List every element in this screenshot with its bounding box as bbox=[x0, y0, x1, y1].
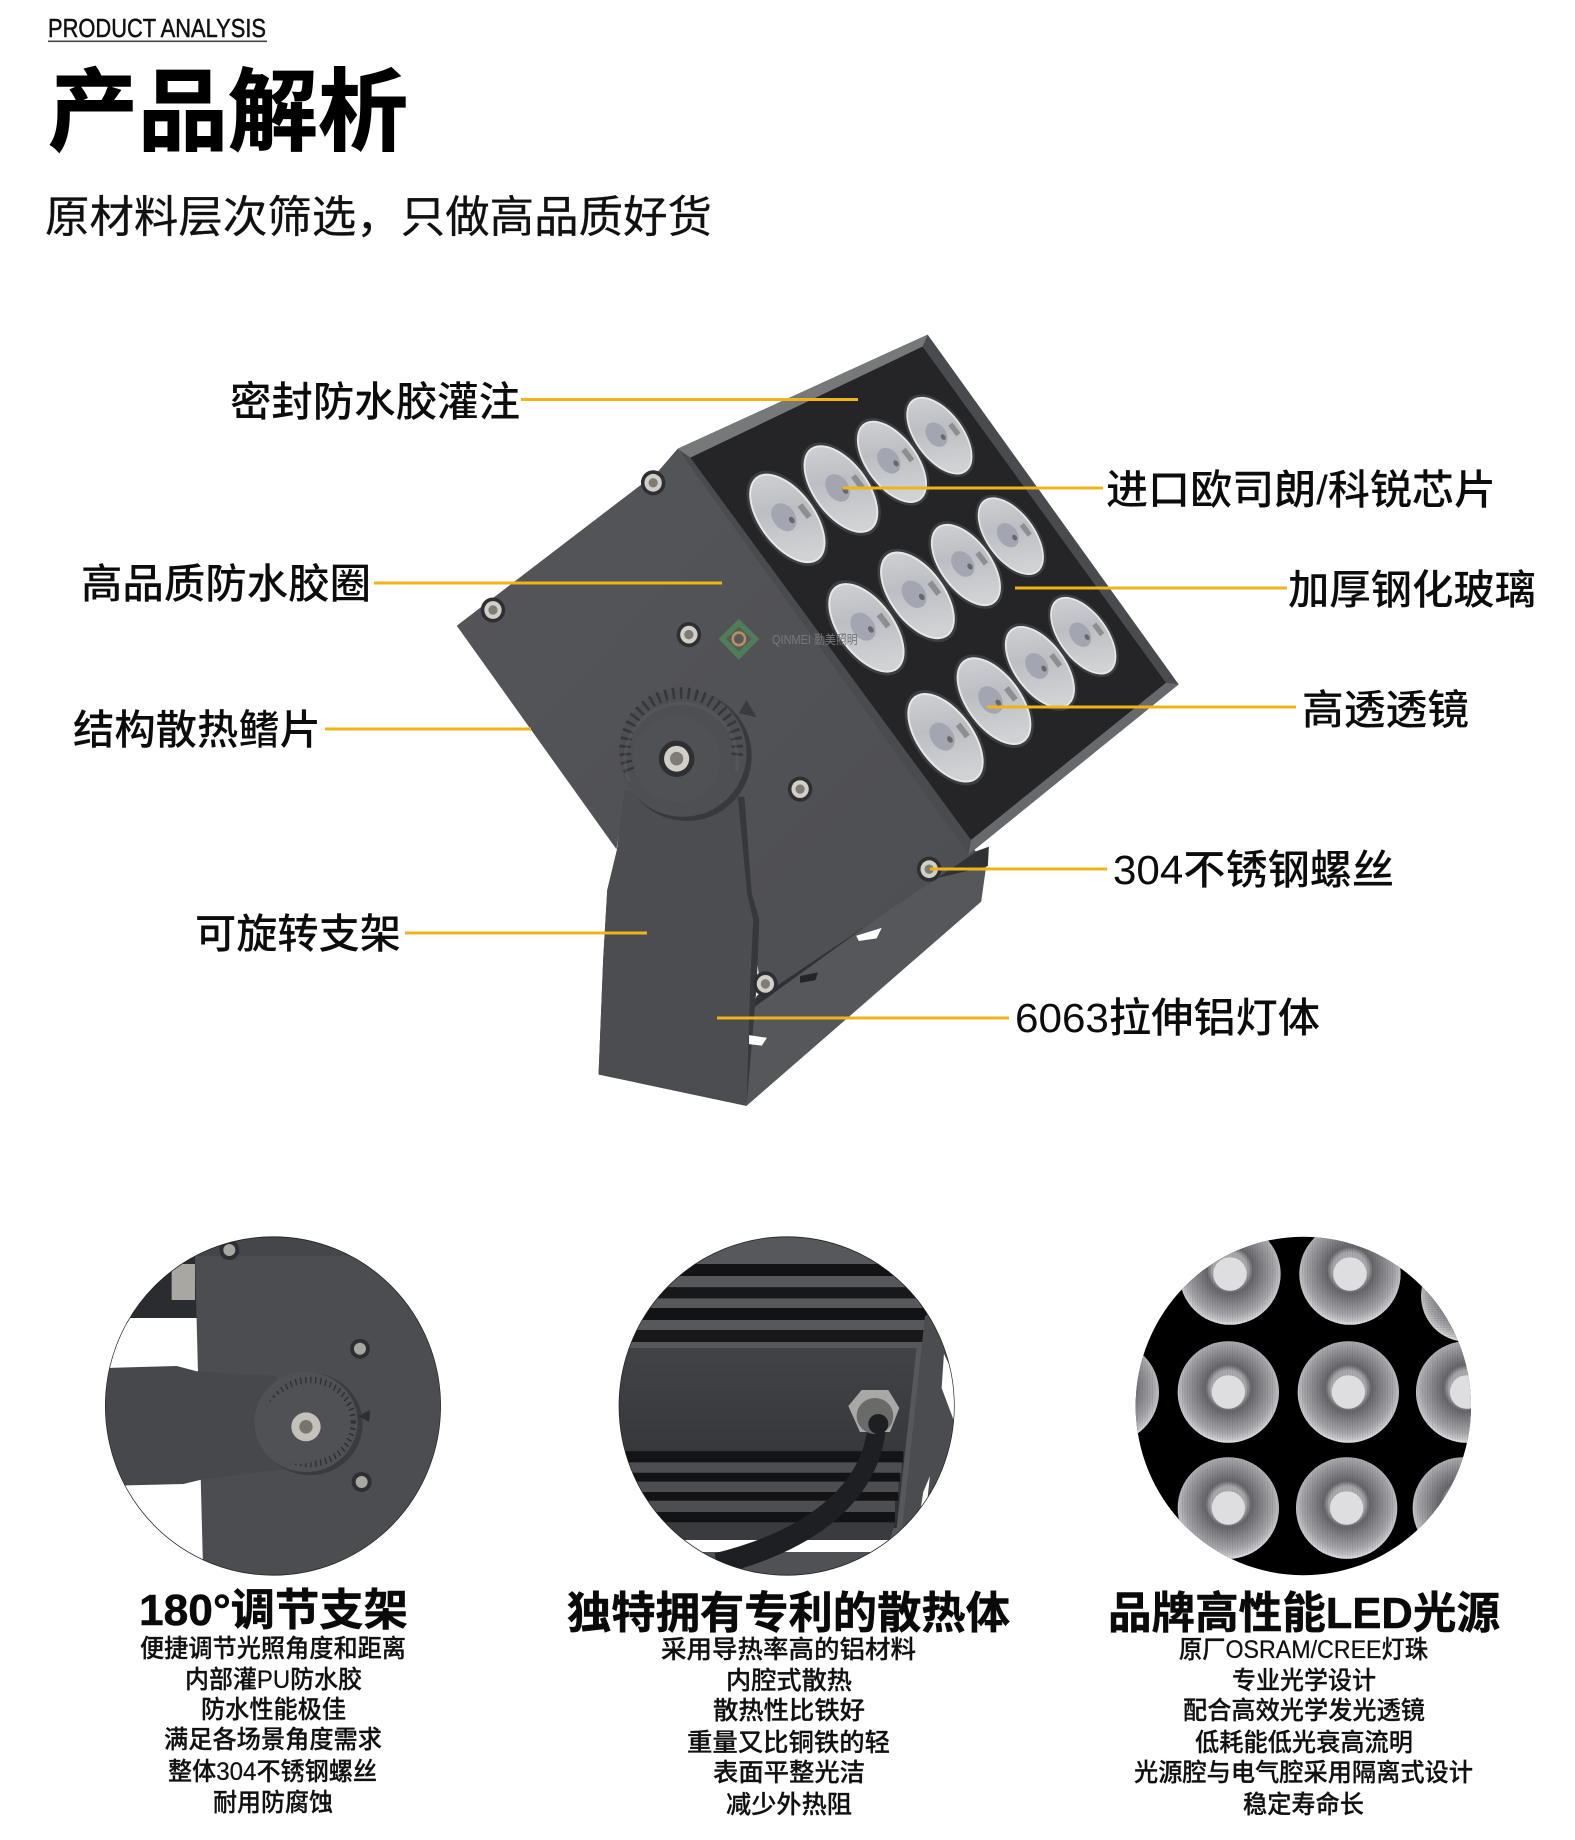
adjustment knob bbox=[619, 689, 757, 821]
black glass face bbox=[690, 347, 1166, 840]
watermark logo: QINMEI 勤美照明 bbox=[772, 633, 858, 647]
circular photo: LED lenses bbox=[1136, 1236, 1471, 1576]
heading: 180°调节支架 bbox=[139, 1586, 408, 1635]
description: 稳定寿命长 bbox=[1243, 1791, 1364, 1819]
product illustration: floodlight bbox=[457, 335, 1179, 1106]
description bbox=[1134, 1636, 1473, 1819]
callout: 可旋转支架: 可旋转支架 bbox=[195, 911, 401, 957]
mounting slots bbox=[749, 928, 882, 1046]
panel: patented heat sink bbox=[567, 1232, 1010, 1819]
description: 采用导热率高的铝材料 bbox=[661, 1636, 916, 1664]
callout: 加厚钢化玻璃: 加厚钢化玻璃 bbox=[1288, 567, 1536, 613]
description: 减少外热阻 bbox=[726, 1791, 852, 1819]
callout: 结构散热鳍片: 结构散热鳍片 bbox=[73, 707, 321, 753]
header: product analysis bbox=[45, 13, 712, 242]
description: 表面平整光洁 bbox=[713, 1759, 865, 1787]
circular photo: bracket detail bbox=[105, 1236, 441, 1576]
description: 原厂OSRAM/CREE灯珠 bbox=[1179, 1636, 1428, 1664]
description: 配合高效光学发光透镜 bbox=[1183, 1697, 1425, 1725]
description: 满足各场景角度需求 bbox=[164, 1726, 382, 1754]
description: 散热性比铁好 bbox=[713, 1697, 865, 1725]
housing side panel bbox=[457, 449, 976, 996]
description: 整体304不锈钢螺丝 bbox=[168, 1758, 377, 1786]
tagline: 原材料层次筛选，只做高品质好货 bbox=[45, 193, 712, 242]
circular photo: heat sink fins bbox=[618, 1236, 955, 1576]
bracket rear section bbox=[747, 847, 989, 1106]
heading: 品牌高性能LED光源 bbox=[1108, 1589, 1500, 1638]
description: 内部灌PU防水胶 bbox=[185, 1666, 362, 1694]
title: 产品解析 bbox=[48, 63, 408, 163]
description bbox=[661, 1636, 916, 1819]
description: 内腔式散热 bbox=[726, 1667, 852, 1695]
description: 光源腔与电气腔采用隔离式设计 bbox=[1134, 1759, 1473, 1787]
callout: 进口欧司朗/科锐芯片: 进口欧司朗/科锐芯片 bbox=[1106, 467, 1496, 513]
front frame bbox=[678, 335, 1179, 855]
english subtitle: PRODUCT ANALYSIS bbox=[48, 13, 266, 43]
lens array bbox=[730, 381, 1133, 800]
heading: 独特拥有专利的散热体 bbox=[567, 1589, 1010, 1638]
callout: 高透透镜: 高透透镜 bbox=[1302, 687, 1469, 733]
description: 专业光学设计 bbox=[1232, 1667, 1376, 1695]
bracket arm bbox=[599, 790, 759, 1106]
screws bbox=[481, 470, 941, 996]
description: 防水性能极佳 bbox=[201, 1696, 346, 1724]
description: 便捷调节光照角度和距离 bbox=[140, 1635, 406, 1663]
watermark logo bbox=[718, 619, 858, 660]
description: 耐用防腐蚀 bbox=[213, 1789, 333, 1817]
callout: 304不锈钢螺丝: 304不锈钢螺丝 bbox=[1113, 847, 1394, 893]
callout: 密封防水胶灌注: 密封防水胶灌注 bbox=[230, 379, 520, 425]
callout: 高品质防水胶圈: 高品质防水胶圈 bbox=[81, 561, 371, 607]
callout: 6063拉伸铝灯体: 6063拉伸铝灯体 bbox=[1015, 995, 1320, 1041]
description bbox=[140, 1635, 406, 1817]
panel: branded LED source bbox=[1110, 1236, 1500, 1816]
description: 低耗能低光衰高流明 bbox=[1195, 1729, 1413, 1757]
description: 重量又比铜铁的轻 bbox=[687, 1729, 890, 1757]
panel: 180 degree bracket bbox=[105, 1236, 441, 1814]
